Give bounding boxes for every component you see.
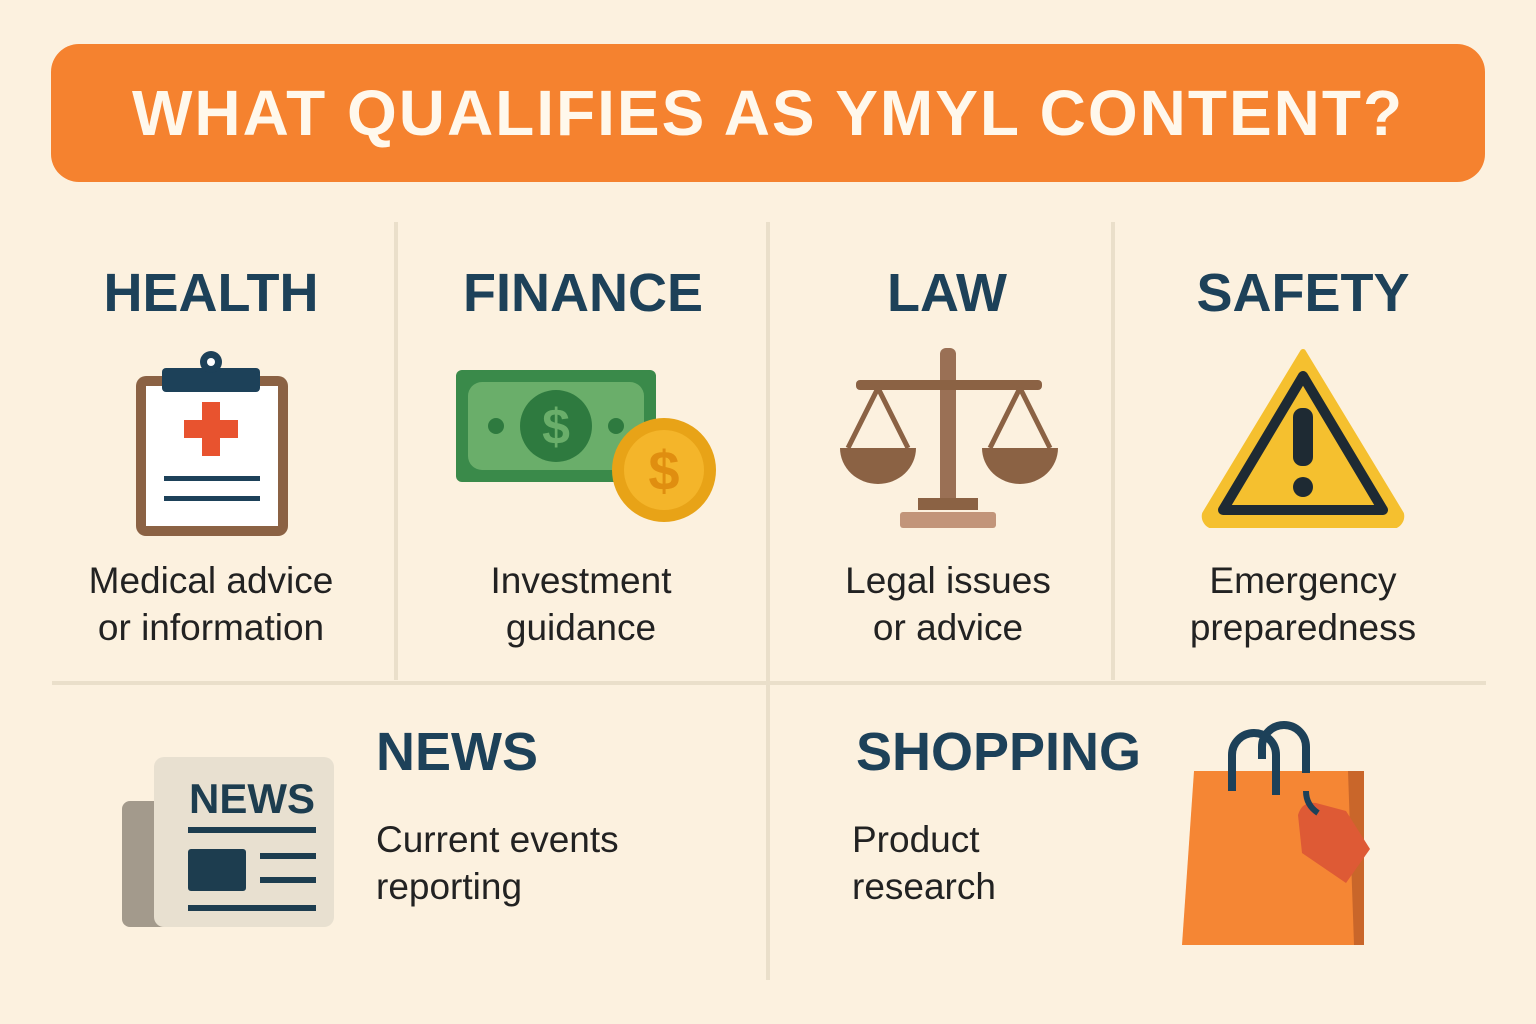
icon: clipboard	[136, 351, 288, 536]
panel: safety	[1190, 263, 1416, 648]
panel: law	[840, 263, 1058, 648]
panel: finance	[456, 263, 716, 648]
description: finance: guidance	[506, 607, 656, 648]
description: law	[845, 560, 1051, 648]
description: safety	[1190, 560, 1416, 648]
description: health: or information	[98, 607, 324, 648]
panel: shopping	[852, 721, 1370, 945]
description: safety: Emergency	[1209, 560, 1397, 601]
icon: money: $	[542, 399, 570, 455]
description: shopping	[852, 819, 996, 907]
heading: law: LAW	[887, 263, 1007, 323]
icon: shopping bag	[1182, 721, 1370, 945]
description: shopping: research	[852, 866, 996, 907]
icon: scales	[840, 348, 1058, 528]
description: safety: preparedness	[1190, 607, 1416, 648]
icon: newspaper	[122, 757, 334, 927]
panel: news	[122, 722, 619, 927]
description: news: reporting	[376, 866, 522, 907]
heading: news: NEWS	[376, 722, 538, 782]
icon: warning	[1202, 349, 1404, 528]
description: shopping: Product	[852, 819, 980, 860]
description: finance: Investment	[490, 560, 671, 601]
panel: health	[89, 263, 333, 648]
heading: finance: FINANCE	[463, 263, 703, 323]
heading: safety: SAFETY	[1196, 263, 1410, 323]
title banner	[51, 44, 1485, 182]
description: health: Medical advice	[89, 560, 333, 601]
description: news: Current events	[376, 819, 619, 860]
heading: shopping: SHOPPING	[856, 722, 1141, 782]
description: law: Legal issues	[845, 560, 1051, 601]
description: health	[89, 560, 333, 648]
heading: health: HEALTH	[104, 263, 318, 323]
description: finance	[490, 560, 672, 648]
icon: money: $	[648, 439, 680, 502]
title banner: WHAT QUALIFIES AS YMYL CONTENT?	[132, 77, 1404, 149]
icon: newspaper: NEWS	[189, 775, 315, 822]
description: news	[376, 819, 619, 907]
icon: money	[456, 370, 716, 522]
description: law: or advice	[873, 607, 1023, 648]
